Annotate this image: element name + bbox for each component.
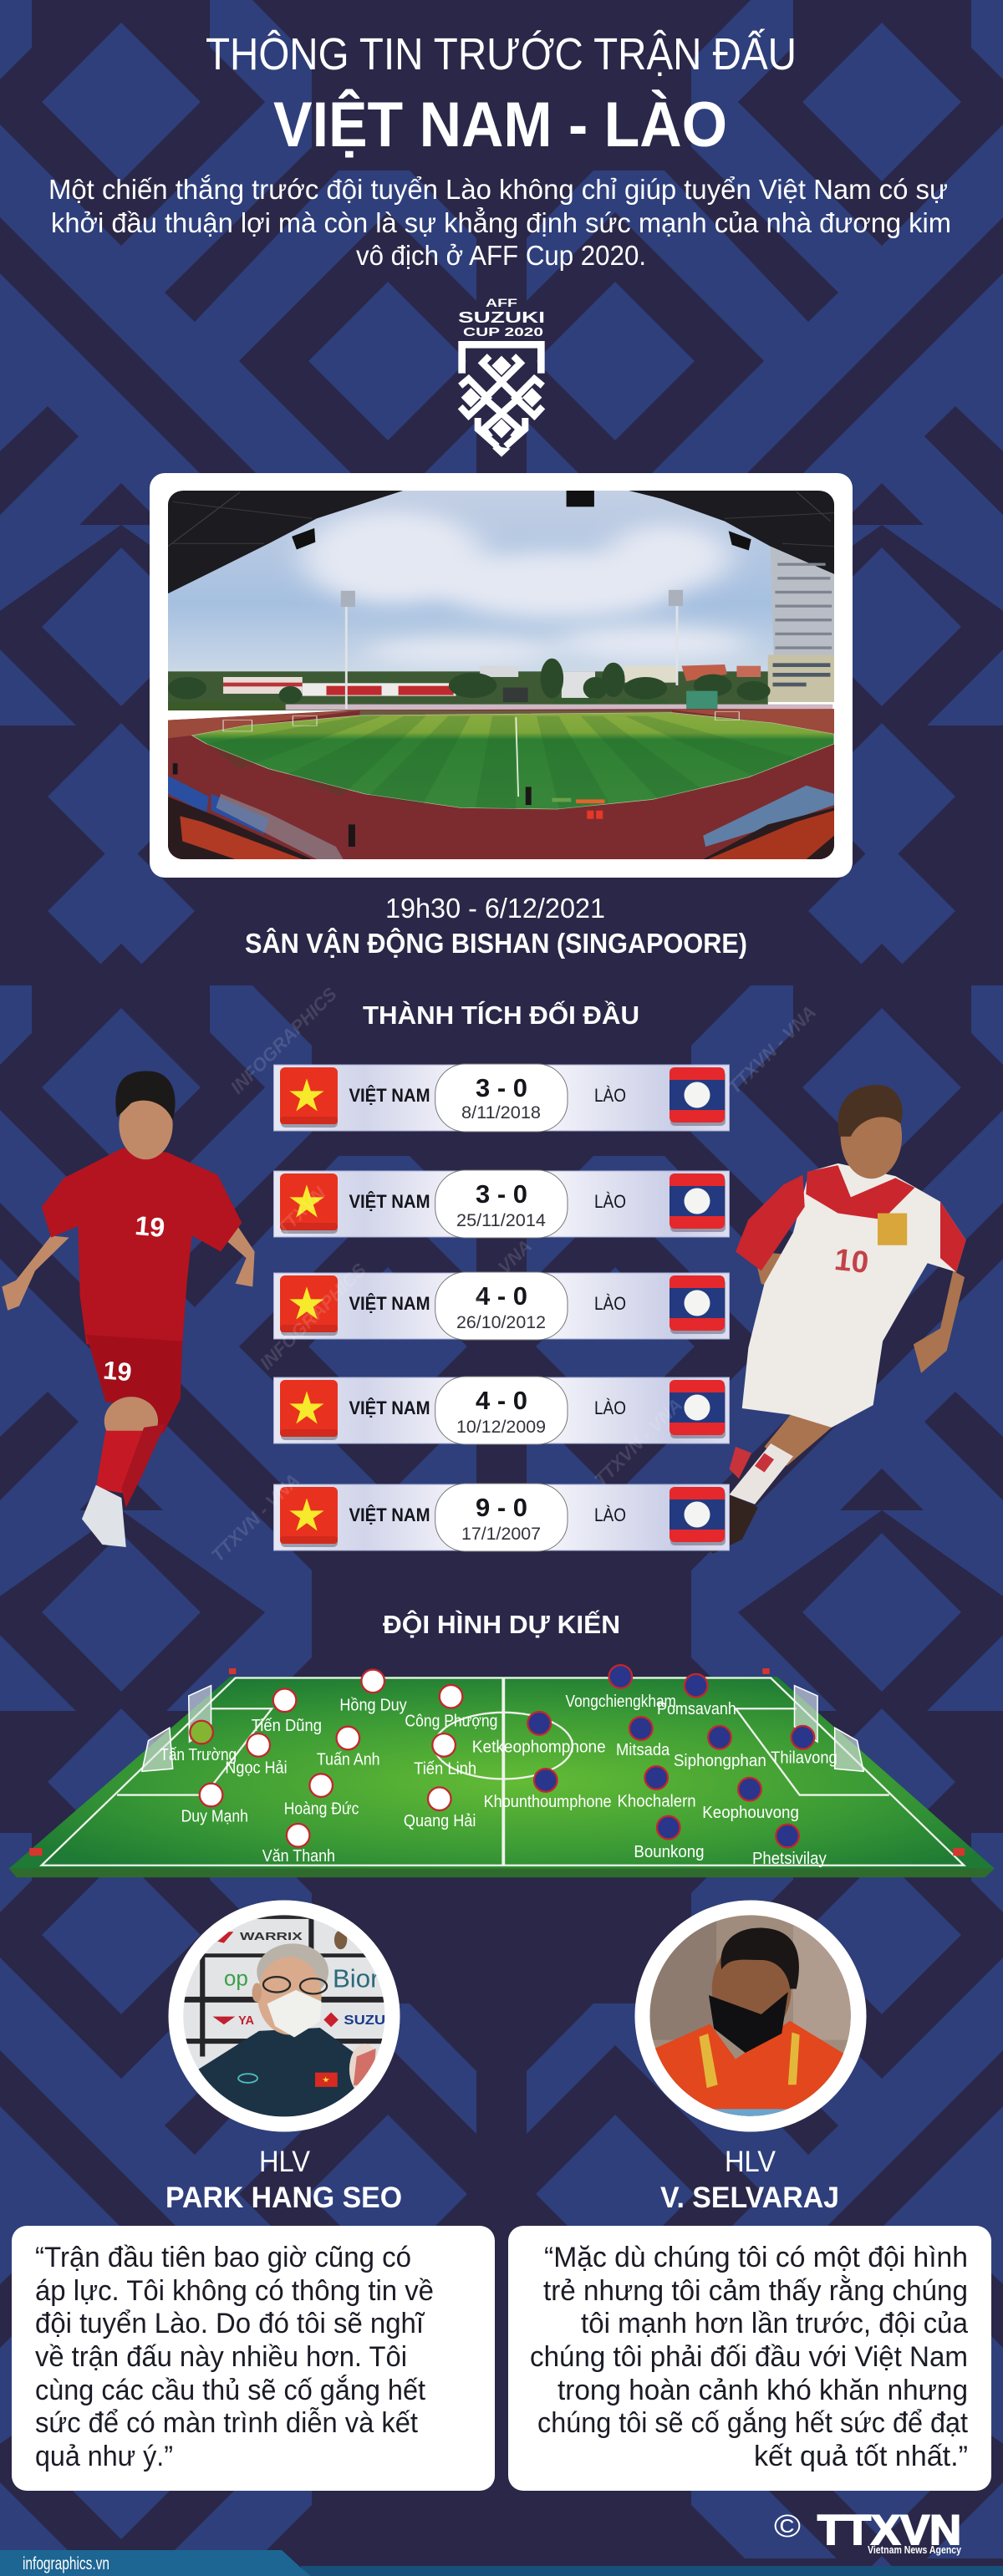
panel: quote V. Selvaraj: chúng tôi sẽ cố gắng hết sức để đạt [537,2407,969,2439]
player name labels: Pomsavanh [657,1699,736,1718]
coach title: Park Hang Seo: PARK HANG SEO [165,2181,402,2214]
player name labels: Quang Hải [404,1811,476,1830]
match time: 19h30 - 6/12/2021 [385,893,605,924]
row: 26/10/2012: LÀO [594,1293,626,1314]
watermarks: INFOGRAPHICS [256,1259,370,1374]
logo: AFF Suzuki Cup 2020: CUP 2020 [463,325,543,339]
copyright logo: TTXVN: TTXVN [817,2507,961,2553]
row: 26/10/2012: VIỆT NAM [349,1293,430,1314]
row: 17/1/2007: LÀO [594,1504,626,1525]
player name labels: Tiến Linh [414,1759,476,1778]
logo: AFF Suzuki Cup 2020: AFF [486,296,518,309]
coach portrait: Park Hang Seo: SUZU [344,2013,385,2028]
player name labels: Hồng Duy [339,1696,407,1715]
footer bar: infographics.vn [0,2550,1003,2576]
title line 1: THÔNG TIN TRƯỚC TRẬN ĐẤU [206,29,797,79]
row: 10/12/2009: 10/12/2009 [456,1418,546,1437]
player name labels: Khounthoumphone [484,1792,612,1811]
player name labels: Thilavong [771,1748,838,1767]
panel: quote V. Selvaraj: trẻ nhưng tôi cảm thấy rằng chúng [543,2275,968,2307]
row: 8/11/2018: VIỆT NAM [349,1085,430,1106]
row: 17/1/2007 [274,1484,729,1551]
row: 8/11/2018 [274,1064,729,1132]
panel: quote V. Selvaraj: tôi mạnh hơn lần trước, đội của [581,2308,968,2339]
player name labels: Phetsivilay [752,1849,827,1868]
row: 8/11/2018: LÀO [594,1085,626,1106]
left goal [142,1686,211,1771]
intro paragraph: khởi đầu thuận lợi mà còn là sự khẳng định sức mạnh của nhà đương kim [51,207,951,238]
intro paragraph [48,174,951,271]
row: 25/11/2014: 25/11/2014 [456,1211,546,1230]
player name labels: Ketkeophomphone [472,1737,606,1756]
panel: quote Park Hang Seo: “Trận đầu tiên bao giờ cũng có [35,2242,411,2273]
logo: AFF Suzuki Cup 2020 [458,296,545,457]
player: Vietnam no. 19: 19 [134,1210,166,1243]
coach title: Park Hang Seo: HLV [259,2146,311,2178]
watermarks: TTXVN - VNA [590,1394,686,1491]
copyright logo: TTXVN: © [774,2509,801,2544]
player name labels: Công Phượng [405,1712,497,1731]
player name labels: Keophouvong [702,1803,799,1822]
coach title: V. Selvaraj: HLV [725,2146,776,2178]
player name labels: Tuấn Anh [317,1750,380,1769]
row: 10/12/2009: 4 - 0 [476,1386,527,1415]
coach title: Park Hang Seo [165,2146,402,2214]
player name labels: Mitsada [616,1740,670,1759]
copyright logo: TTXVN [774,2507,962,2556]
watermarks: TTXVN - VNA [207,1469,303,1566]
row: 10/12/2009: VIỆT NAM [349,1397,430,1418]
panel: head-to-head results table [274,1064,729,1551]
coach title: V. Selvaraj: V. SELVARAJ [660,2181,839,2214]
watermarks: TTXVN - VNA [440,1235,536,1332]
coach portrait: Park Hang Seo [169,1901,400,2131]
player name labels: Vongchiengkham [566,1692,676,1711]
logo: AFF Suzuki Cup 2020: SUZUKI [458,309,545,326]
player name labels: Tiến Dũng [252,1716,322,1735]
row: 25/11/2014: VIỆT NAM [349,1191,430,1212]
panel: quote V. Selvaraj: kết quả tốt nhất.” [754,2441,968,2472]
row: 25/11/2014: LÀO [594,1191,626,1212]
intro paragraph: Một chiến thắng trước đội tuyển Lào không chỉ giúp tuyển Việt Nam có sự [48,174,948,205]
row: 8/11/2018: 3 - 0 [476,1073,527,1102]
panel: quote V. Selvaraj: “Mặc dù chúng tôi có một đội hình [544,2242,968,2273]
row: 26/10/2012: 4 - 0 [476,1281,527,1311]
heading: expected lineup: ĐỘI HÌNH DỰ KIẾN [383,1609,620,1639]
title line 2: VIỆT NAM - LÀO [273,89,727,160]
player name labels: Tấn Trường [160,1745,237,1764]
watermarks: INFOGRAPHICS [227,983,341,1098]
player name labels: Văn Thanh [262,1846,335,1866]
stadium name: SÂN VẬN ĐỘNG BISHAN (SINGAPOORE) [245,927,747,959]
player name labels: Khochalern [618,1791,696,1810]
coach portrait: V. Selvaraj [635,1901,866,2131]
panel: quote V. Selvaraj [508,2226,991,2491]
watermarks: TTXVN [272,1182,330,1240]
player name labels: Duy Mạnh [181,1807,248,1826]
panel: quote Park Hang Seo: quả như ý.” [35,2441,173,2472]
panel: quote V. Selvaraj: trong hoàn cảnh khó khăn nhưng [558,2375,968,2406]
row: 17/1/2007: VIỆT NAM [349,1504,430,1525]
row: 17/1/2007: 17/1/2007 [461,1525,541,1544]
player name labels [160,1692,838,1868]
row: 25/11/2014: 3 - 0 [476,1179,527,1209]
coach portrait: Park Hang Seo: Bior [333,1964,379,1993]
row: 17/1/2007: 9 - 0 [476,1493,527,1522]
watermarks [207,983,820,1566]
footer bar: infographics.vn: infographics.vn [23,2554,109,2573]
heading: head-to-head: THÀNH TÍCH ĐỐI ĐẦU [363,1000,639,1030]
right goal [795,1686,863,1771]
row: 25/11/2014 [274,1170,729,1238]
panel: quote Park Hang Seo: cùng các cầu thủ sẽ cố gắng hết [35,2375,426,2406]
stadium photo [168,491,834,859]
player: Laos no. 10: 10 [832,1242,870,1280]
player name labels: Ngọc Hải [225,1759,288,1778]
row: 10/12/2009: LÀO [594,1397,626,1418]
row: 26/10/2012: 26/10/2012 [456,1313,546,1332]
coach portrait: Park Hang Seo: WARRIX [240,1930,303,1942]
coach title: V. Selvaraj [660,2146,839,2214]
panel: quote Park Hang Seo [12,2226,495,2491]
player name labels: Bounkong [634,1842,705,1861]
intro paragraph: vô địch ở AFF Cup 2020. [356,240,646,271]
panel: quote Park Hang Seo: áp lực. Tôi không có thông tin về [35,2275,434,2307]
panel: quote V. Selvaraj: chúng tôi phải đối đầu với Việt Nam [530,2341,968,2373]
lineup pitch [9,1665,995,1877]
player name labels: Hoàng Đức [284,1800,359,1819]
player: Laos no. 10 [700,1085,966,1554]
player: Vietnam no. 19: 19 [102,1356,133,1387]
panel: quote Park Hang Seo: sức để có màn trình diễn và kết [35,2407,419,2439]
Laos players [527,1665,814,1847]
panel: stadium photo frame [150,473,853,878]
coach portrait: Park Hang Seo: op [224,1966,248,1991]
title [206,29,797,160]
Vietnam players [190,1670,462,1847]
panel: quote Park Hang Seo: về trận đấu này nhiều hơn. Tôi [35,2341,407,2373]
row: 8/11/2018: 8/11/2018 [461,1103,541,1123]
panel: quote Park Hang Seo: đội tuyển Lào. Do đó tôi sẽ nghĩ [35,2308,425,2339]
watermarks: TTXVN - VNA [724,1001,820,1098]
copyright logo: TTXVN: Vietnam News Agency [868,2543,962,2556]
player name labels: Siphongphan [674,1751,766,1770]
player: Vietnam no. 19 [2,1071,255,1547]
row: 10/12/2009 [274,1377,729,1444]
row: 26/10/2012 [274,1272,729,1340]
coach portrait: Park Hang Seo: YA [238,2014,254,2028]
